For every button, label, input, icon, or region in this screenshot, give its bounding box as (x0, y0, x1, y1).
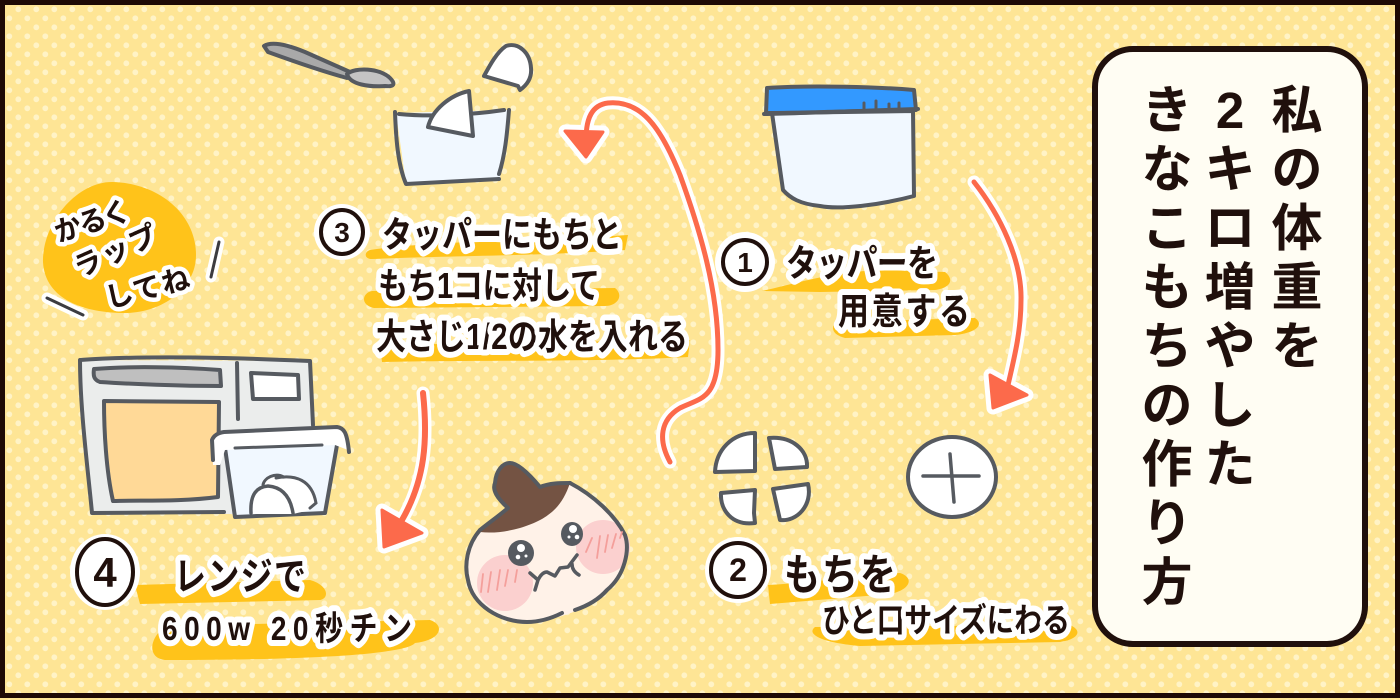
title column 2: ロ (1204, 200, 1256, 257)
icon: microwave (80, 357, 313, 514)
icon: mochi piece in cup (428, 91, 473, 136)
title column 1: 私 (1271, 82, 1323, 139)
step 1 number (715, 232, 775, 292)
blush lines (481, 532, 622, 592)
step 4 instruction (70, 534, 439, 660)
step 1 text: タッパーを (786, 243, 938, 285)
title column 1: を (1271, 318, 1323, 375)
arrow: step 1 to 2 (974, 182, 1027, 408)
title column 1: 体 (1271, 200, 1323, 257)
emphasis marks (47, 242, 219, 315)
step 1 text: 用意する (838, 291, 970, 333)
step 3 number: 3 (334, 217, 350, 248)
eyes (508, 540, 534, 566)
step 4 text: 600w 20秒チン (162, 610, 412, 648)
title column 3: こ (1141, 200, 1193, 257)
title column 2: 2 (1216, 82, 1244, 139)
icon: container in microwave (212, 427, 349, 517)
step 3 number (314, 204, 370, 260)
title panel (1095, 49, 1365, 644)
step 3 highlight bands (364, 235, 690, 362)
step 1 highlight bands (762, 270, 979, 338)
step 4 text (162, 556, 412, 648)
character face (466, 463, 630, 622)
cheeks (477, 555, 533, 611)
arrow: step 3 to 4 (382, 393, 425, 547)
bubble text: かるく (51, 195, 134, 248)
step 2 text (784, 552, 1070, 640)
step 3 instruction (314, 204, 690, 362)
arrow: step 2 to 3 (565, 103, 718, 462)
icon: spoon (264, 44, 393, 86)
title column 2: や (1204, 318, 1256, 375)
title column 3: 方 (1141, 554, 1193, 611)
step 3 text (376, 215, 688, 358)
step 4 number: 4 (93, 549, 117, 596)
step 4 text: レンジで (174, 556, 306, 599)
bubble text (51, 195, 193, 314)
step 3 text: タッパーにもちと (382, 215, 622, 256)
step 4 number (70, 534, 140, 610)
title column 3: ち (1141, 318, 1193, 375)
microwave top bar (94, 367, 221, 386)
title column 2: た (1204, 436, 1256, 493)
title column 2: キ (1204, 141, 1256, 198)
step 2 instruction (705, 537, 1077, 646)
title column 1 (1271, 82, 1323, 375)
title column 2: し (1204, 377, 1256, 434)
step 2 number: 2 (729, 552, 747, 588)
icon: mochi cut into four (715, 433, 809, 523)
title column 3: な (1141, 141, 1193, 198)
step 3 text: もち1コに対して (378, 266, 600, 307)
step 2 number (705, 537, 771, 603)
container mochi (250, 475, 317, 514)
title column 3 (1141, 82, 1193, 611)
icon: whole mochi with cut lines (908, 437, 996, 517)
icon: cup of water with mochi (395, 91, 509, 184)
title column 1: の (1271, 141, 1323, 198)
step 3 text: 大さじ1/2の水を入れる (376, 317, 688, 358)
title column 3: も (1141, 259, 1193, 316)
step 1 text (786, 243, 970, 333)
step 4 highlight bands (135, 580, 439, 660)
icon: falling mochi piece (484, 45, 531, 90)
title column 3: き (1141, 82, 1193, 139)
title column 2: 増 (1204, 259, 1256, 316)
title column 3: 作 (1141, 436, 1193, 493)
step 1 instruction (715, 232, 979, 338)
speech bubble: wrap lightly (43, 182, 196, 314)
mouth (530, 555, 579, 590)
bubble text: ラップ (69, 219, 162, 283)
microwave panel (251, 373, 299, 399)
hair (480, 463, 570, 533)
lid tab marks (864, 101, 899, 109)
bubble text: してね (102, 263, 193, 314)
title column 3: り (1141, 495, 1193, 552)
container lid (212, 427, 348, 465)
step 2 text: もちを (784, 552, 896, 600)
step 2 text: ひと口サイズにわる (822, 602, 1070, 640)
title column 3: の (1141, 377, 1193, 434)
microwave door (104, 401, 219, 501)
title column 2 (1204, 82, 1256, 493)
title column 1: 重 (1271, 259, 1323, 316)
step 2 highlight bands (768, 573, 1077, 646)
icon: food container with blue lid (764, 87, 918, 207)
step 1 number: 1 (737, 247, 753, 278)
